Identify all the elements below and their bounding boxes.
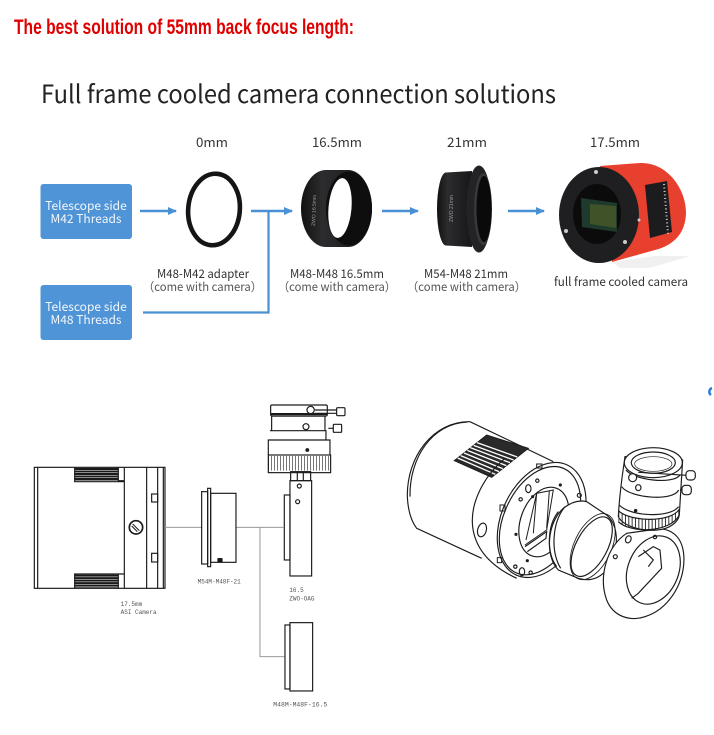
icon: blue edge dot (709, 388, 712, 395)
label: ASI camera: ASI Camera (121, 609, 157, 616)
icon: 16.5mm tube (301, 170, 372, 247)
box: M48 threads: Telescope side (45, 298, 127, 315)
arrow: tube to 21mm adapter (382, 210, 418, 212)
label: ASI camera: 17.5mm (121, 601, 143, 608)
drawing: ASI camera (34, 467, 165, 588)
spacing labels (196, 132, 640, 151)
icon: M48-M42 ring (185, 172, 243, 247)
connector lines (165, 527, 284, 657)
box: M42 threads: M42 Threads (50, 210, 122, 227)
line: M48 connector (143, 211, 268, 312)
icon: 21mm adapter (437, 166, 492, 252)
spacing labels: 16.5mm (312, 132, 362, 151)
box: M42 threads: Telescope side (45, 197, 127, 214)
box: M48 threads: M48 Threads (50, 311, 122, 328)
panel: side-view technical drawing (34, 405, 345, 709)
box: M42 threads (40, 184, 132, 239)
drawing: guider focuser (618, 448, 695, 530)
component captions: full frame cooled camera (554, 273, 688, 290)
drawing: off-axis guider (603, 528, 690, 618)
component captions: （come with camera） (143, 278, 262, 295)
label: ZWO-OAG: ZWO-OAG (289, 596, 315, 603)
arrow: M42 to adapter (140, 210, 176, 212)
drawing: M48-M48 16.5 adapter (285, 623, 313, 691)
drawing: 21mm adapter ring (549, 501, 624, 587)
label: ZWO-OAG (289, 587, 315, 603)
drawing: ZWO OAG (268, 405, 345, 576)
arrow: adapter to 16.5mm tube (251, 210, 292, 212)
label: M48M-M48F-16.5: M48M-M48F-16.5 (273, 702, 328, 709)
component captions (143, 265, 688, 295)
icon: 16.5mm tube: ZWO 16.5mm (311, 195, 318, 226)
spacing labels: 21mm (447, 132, 487, 151)
component captions: （come with camera） (407, 278, 526, 295)
label: ZWO-OAG: 16.5 (289, 587, 304, 594)
spacing labels: 17.5mm (590, 132, 640, 151)
component captions: M48-M42 adapter (157, 265, 249, 282)
component captions: （come with camera） (278, 278, 396, 295)
heading: Full frame cooled camera connection solutions (41, 75, 556, 111)
panel: exploded isometric drawing (407, 422, 695, 618)
spacing labels: 0mm (196, 132, 228, 151)
icon: full frame cooled camera (559, 163, 690, 268)
drawing: M54-M48 adapter (202, 488, 236, 567)
title: best solution: The best solution of 55mm back focus length: (14, 16, 354, 39)
label: M54M-M48F-21: M54M-M48F-21 (198, 578, 241, 585)
component captions: M54-M48 21mm (424, 265, 508, 282)
icon: 21mm adapter: ZWO 21mm (449, 195, 455, 222)
label: ASI camera (121, 601, 157, 616)
drawing: camera body (407, 422, 604, 592)
arrow: adapter to camera (508, 210, 544, 212)
component captions: M48-M48 16.5mm (290, 265, 384, 282)
panel: connection flow (40, 132, 690, 340)
box: M48 threads (40, 285, 132, 340)
